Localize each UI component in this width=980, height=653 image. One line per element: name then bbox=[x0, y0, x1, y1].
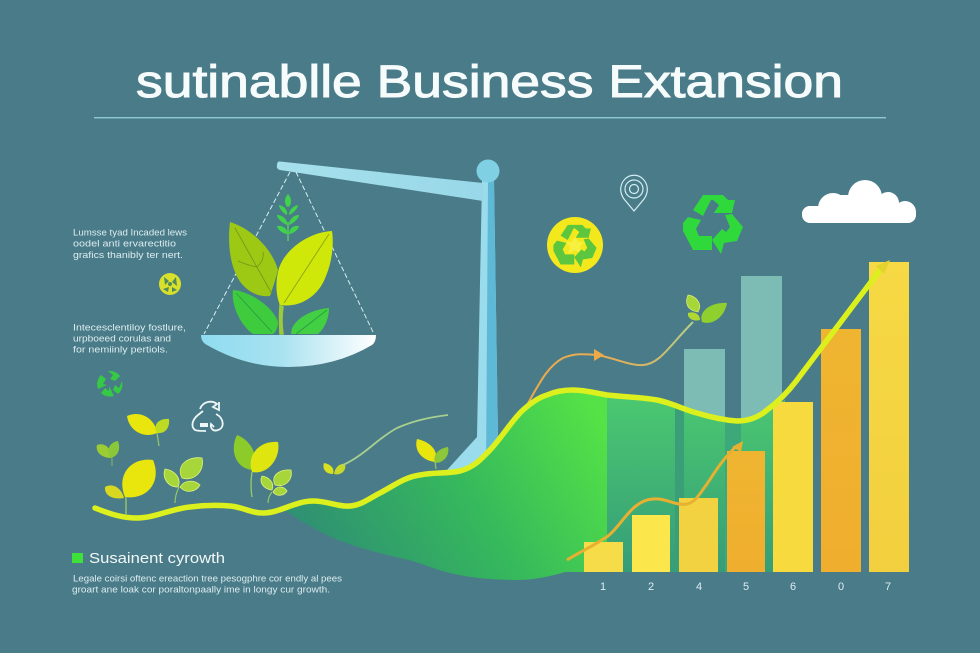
icon: small yellow badge bbox=[159, 273, 181, 295]
seedling: top bbox=[127, 414, 169, 446]
text block: upper note: Lumsse tyad Incaded lews bbox=[73, 228, 187, 238]
seedling: right pair bbox=[416, 439, 448, 469]
text block: upper note bbox=[73, 228, 187, 261]
axis labels: 5 bbox=[743, 581, 749, 593]
text block: upper note: grafics thanibly ter nert. bbox=[73, 250, 183, 261]
text block: middle note: Intecesclentiloy fostlure, bbox=[73, 322, 186, 334]
bar 6 bbox=[821, 329, 861, 572]
title: sutinablle Business Extansion bbox=[136, 56, 843, 107]
legend text: Legale coirsi oftenc ereaction tree pesogphre cor endly al pees bbox=[73, 574, 342, 584]
seedling: second veined trio bbox=[261, 470, 291, 503]
icon: green recycle bbox=[683, 195, 743, 254]
scale beam bbox=[277, 161, 483, 201]
icon: small green recycle bbox=[97, 371, 122, 397]
legend: sustainable growth bbox=[72, 550, 342, 596]
legend swatch bbox=[72, 553, 83, 563]
icon: balance scale with plant bbox=[201, 160, 500, 470]
seedling: veined trio bbox=[164, 458, 203, 503]
bar 1 bbox=[584, 542, 623, 572]
plant leaves bbox=[229, 222, 333, 334]
bar chart bbox=[584, 262, 909, 572]
sprig bbox=[277, 194, 299, 241]
seedling: centre pair bbox=[234, 435, 278, 497]
seedling: small yellow pair bbox=[323, 463, 345, 474]
axis labels: 7 bbox=[885, 581, 891, 593]
bar 7 bbox=[869, 262, 909, 572]
legend text bbox=[72, 574, 342, 596]
upper thin arrow with leaf bbox=[527, 295, 727, 405]
yellow growth ribbon with arrow bbox=[95, 260, 890, 518]
scale pan bbox=[201, 335, 376, 367]
teal background bars bbox=[684, 276, 782, 429]
bar 5 bbox=[773, 402, 813, 572]
icon: yellow recycle badge bbox=[547, 217, 603, 273]
legend heading: Susainent cyrowth bbox=[89, 550, 225, 567]
bar 2 bbox=[632, 515, 670, 572]
text block: middle note: for nemiinly pertiols. bbox=[73, 344, 168, 356]
seedling: small green bbox=[97, 441, 119, 466]
legend text: groart ane loak cor poraltonpaally ime in longy cur growth. bbox=[72, 584, 330, 596]
left seedlings bbox=[97, 414, 448, 514]
bar 3 bbox=[679, 498, 718, 572]
axis labels: 2 bbox=[648, 581, 654, 593]
axis labels bbox=[600, 581, 891, 593]
axis labels: 0 bbox=[838, 581, 844, 593]
icon: location pin bbox=[621, 175, 647, 211]
text block: upper note: oodel anti ervarectitio bbox=[73, 238, 176, 250]
axis labels: 1 bbox=[600, 581, 606, 593]
axis labels: 4 bbox=[696, 581, 702, 593]
dashed strings bbox=[204, 172, 374, 334]
thin curve to seedling bbox=[343, 415, 448, 465]
sprout leaves bbox=[687, 295, 727, 323]
seedling: large yellow bbox=[105, 460, 156, 514]
text block: middle note: urpboeed corulas and bbox=[73, 334, 171, 344]
green growth area bbox=[280, 380, 785, 585]
orange trend arrow bbox=[567, 441, 743, 560]
scale pole bbox=[447, 180, 500, 470]
bar 4 bbox=[727, 451, 765, 572]
icon: cloud bbox=[802, 180, 916, 223]
icon: outline recycle bbox=[192, 402, 223, 431]
axis labels: 6 bbox=[790, 581, 796, 593]
scale pivot bbox=[476, 160, 500, 182]
text block: middle note bbox=[73, 322, 186, 356]
